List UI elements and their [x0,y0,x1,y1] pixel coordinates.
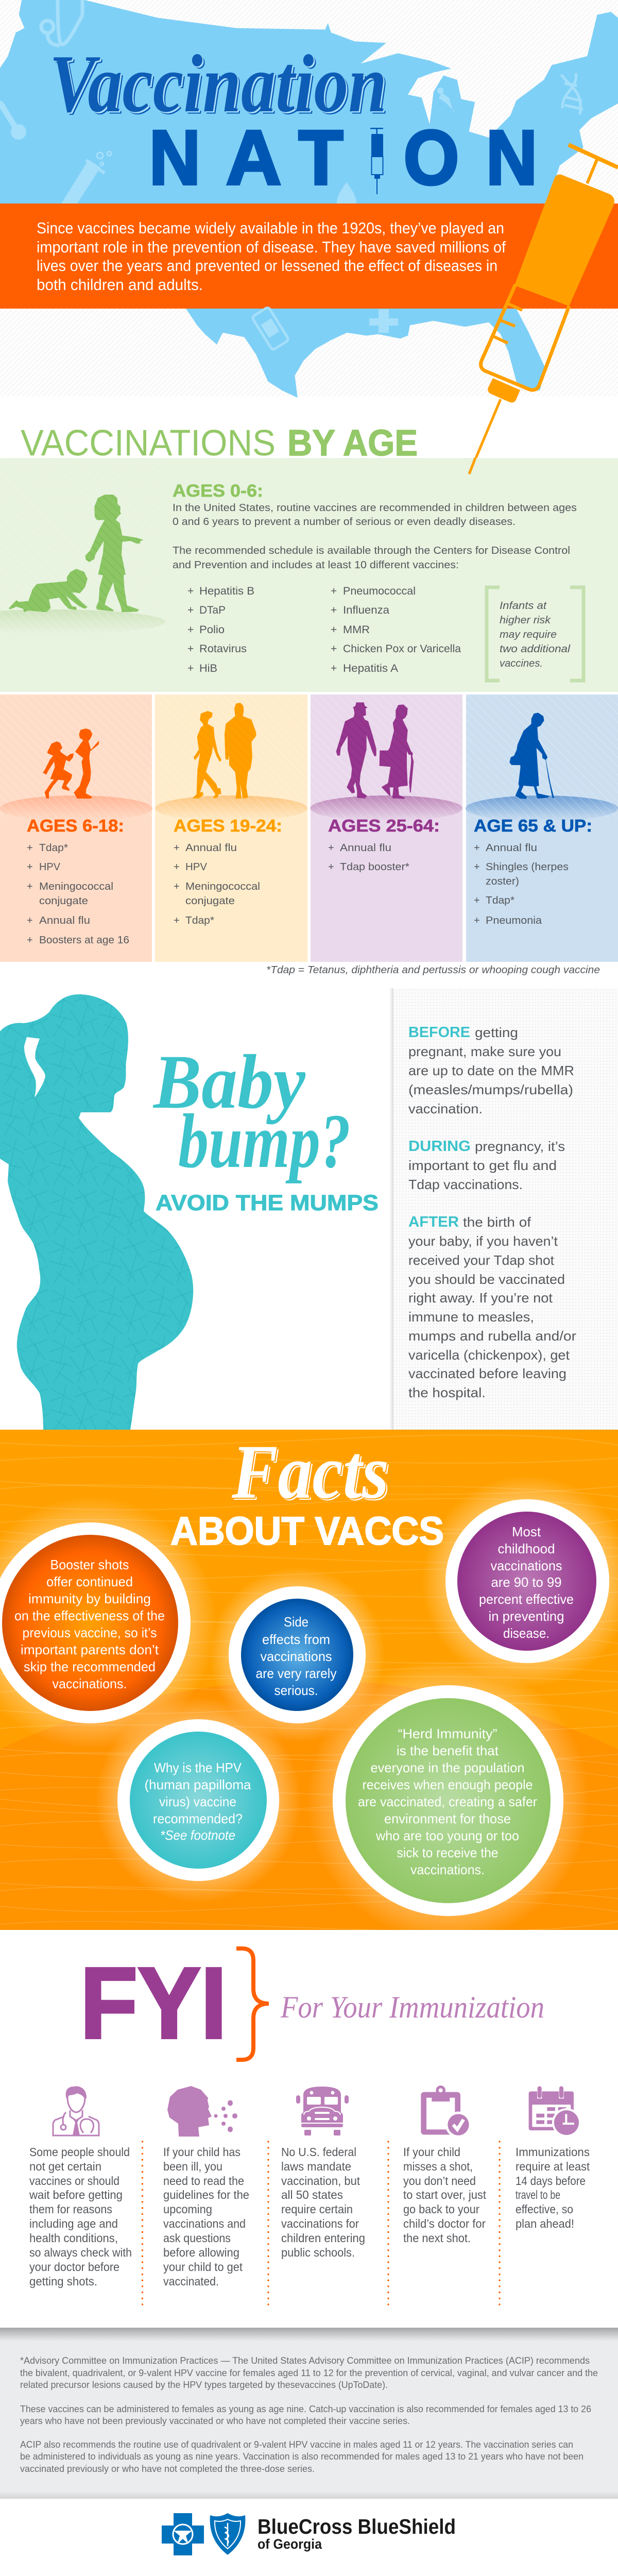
list: conjugate [185,895,235,907]
FYI column 2 text [163,2145,249,2288]
icon: DNA [561,73,583,114]
heading: ages 0-6: AGES 0-6: [173,481,263,501]
bracket callout [487,587,583,681]
bracket callout: vaccines. [500,658,543,669]
FYI column 3 text: all 50 states [281,2188,343,2201]
after text: right away. If you’re not [408,1290,553,1306]
during text: important to get flu and [408,1158,557,1173]
vaccine list column 1 [187,585,254,674]
list: + [174,861,180,873]
FYI column 1 text: Some people should [29,2145,130,2159]
silhouette: two children [43,728,99,799]
FYI column 5 text: require at least [516,2160,590,2173]
list: + [27,915,33,926]
FYI column 3 text: vaccination, but [281,2174,360,2188]
icon: blue shield [210,2513,245,2555]
FYI column 3 text: laws mandate [281,2160,351,2173]
heading: about vaccs: ABOUT VACCS [170,1509,444,1553]
icon: thermometer [0,100,26,140]
bracket callout: two additional [500,643,571,655]
fact bubble: boosters [0,1497,216,1749]
before text: are up to date on the MMR [408,1063,574,1078]
title: NATION [149,114,538,201]
list: Tdap booster* [340,861,409,873]
after text: the hospital. [408,1385,486,1400]
title: NATION: N [149,114,201,201]
vaccine list column 1: + [187,624,194,636]
FYI column 4 text: the next shot. [403,2231,471,2245]
icon: calendar with clock [529,2088,581,2137]
silhouette: toddler and crawling baby [9,495,143,612]
list: Annual flu [340,842,391,854]
FYI column 5 text: 14 days before [516,2174,586,2188]
fact bubble: side effects: are very rarely [255,1666,337,1681]
FYI column 1 text: so always check with [29,2246,132,2259]
list: Tdap* [39,842,68,854]
map of the United States [0,0,618,398]
panel: ages 19-24 [155,694,307,962]
FYI column 3 text [281,2145,365,2259]
vaccine list column 2: + [331,624,337,636]
icon: sneezing head [167,2086,237,2137]
fact bubble: HPV: Why is the HPV [154,1760,242,1775]
list: + [27,881,33,892]
fact bubble: side effects: vaccinations [261,1649,332,1664]
FYI column 2 text: need to read the [163,2174,244,2188]
fact bubble: effectiveness [422,1476,618,1687]
silhouette: adult couple [336,702,414,799]
list: + [474,861,480,873]
icon: stethoscope [41,0,82,45]
icon: medical cross [369,309,398,333]
needle tip overlapping panel [469,458,475,474]
FYI column 1 text: including age and [29,2217,118,2230]
title: Vaccination: Vaccination [49,38,387,129]
heading: baby bump: bump? [178,1098,351,1184]
fact bubble: effectiveness: vaccinations [490,1558,562,1573]
green hill [0,609,165,634]
before text: (measles/mumps/rubella) [408,1082,573,1097]
heading: vaccinations by age: BY AGE [287,423,418,464]
intro text: 0 and 6 years to prevent a number of serious or even deadly diseases. [173,516,516,528]
bracket callout: Infants at [500,600,547,612]
FYI column 4 text: you don’t need [403,2174,476,2188]
fact bubble: effectiveness: disease. [503,1625,550,1641]
list: + [328,842,334,854]
list [174,842,260,926]
vaccine list column 2: Hepatitis A [343,663,398,674]
list: + [174,842,180,854]
fact bubble: effectiveness: are 90 to 99 [491,1574,561,1590]
vaccine list column 1: + [187,643,194,655]
after text: varicella (chickenpox), get [408,1347,570,1363]
after text: AFTER [408,1214,459,1230]
intro text: The recommended schedule is available through the Centers for Disease Control [173,545,570,556]
fact bubble: boosters: important parents don’t [21,1642,159,1657]
fact bubble: side effects: Side [284,1614,308,1630]
bracket callout: higher risk [500,615,551,626]
FYI column 2 text: vaccinations and [163,2217,246,2230]
list: Tdap* [185,915,214,926]
vaccine list column 1: + [187,604,194,616]
vaccine list column 1: Rotavirus [199,643,247,655]
hero panel [0,0,618,474]
vaccine list column 1: + [187,663,194,674]
list: HPV [185,861,208,873]
FYI column 1 text [29,2145,132,2288]
FYI column 2 text: upcoming [163,2202,212,2216]
FYI column 5 text: plan ahead! [516,2217,574,2230]
after text: immune to measles, [408,1309,534,1325]
FYI column 4 text: misses a shot, [403,2160,473,2173]
vaccine list column 2 [331,585,461,674]
list [474,842,569,926]
icon: clipboard with check [421,2086,471,2138]
hill [466,795,618,821]
fact bubble: boosters: skip the recommended [24,1659,156,1674]
hill [310,795,462,821]
vaccine list column 1: DTaP [199,604,226,616]
fact bubble: herd immunity: “Herd Immunity” [398,1726,497,1741]
list: HPV [39,861,61,873]
orange intro banner [0,204,618,309]
list: Annual flu [486,842,537,854]
heading: FYI: FYI [80,1946,227,2060]
list: + [174,915,180,926]
after text: your baby, if you haven’t [408,1233,558,1249]
panel: footnotes: *Advisory Committee on Immunization Practices — The United States Advisory Committee on Immunization Practices (ACIP) recommends [20,2355,590,2366]
icon: drop [337,182,356,204]
panel: footnotes: the bivalent, quadrivalent, or 9-valent HPV vaccine for females aged 11 to 12 for the prevention of cervical, vaginal, and vulvar cancer and the [20,2368,598,2378]
logo: Blue Cross Blue Shield of Georgia: BlueCross BlueShield [258,2515,456,2538]
fact bubble: HPV: (human papilloma [144,1777,251,1792]
FYI column 4 text: child’s doctor for [403,2217,486,2230]
panel: ages 25-64 [310,694,462,962]
FYI column 5 text: Immunizations [516,2145,590,2159]
icon: large orange syringe [469,145,618,474]
panel: ages 0-6 [0,458,618,692]
list: Shingles (herpes [486,861,569,873]
list [328,842,409,873]
vaccine list column 2: Pneumococcal [343,585,416,597]
vaccine list column 2: + [331,643,337,655]
fact bubble: side effects [210,1567,385,1742]
title: NATION: A [226,114,281,201]
heading: AGES 6-18: [27,816,124,835]
icon: syringe letter I [370,128,383,194]
bracket callout: may require [500,629,557,640]
after text: you should be vaccinated [408,1272,565,1287]
FYI column 1 text: them for reasons [29,2202,112,2216]
silhouette: young couple [192,703,256,799]
fact bubble: boosters: vaccinations. [53,1676,127,1691]
list: Annual flu [39,915,90,926]
vaccine list column 2: + [331,604,337,616]
list: Annual flu [185,842,237,854]
fact bubble: boosters: immunity by building [28,1591,151,1606]
FYI column 5 text: effective, so [516,2202,573,2216]
list: Meningococcal [185,881,260,892]
list: + [474,842,480,854]
panel: footnotes [0,2328,618,2499]
fact bubble: effectiveness: in preventing [488,1608,564,1624]
FYI column 3 text: No U.S. federal [281,2145,356,2159]
panel: facts about vaccs [0,1429,618,1942]
silhouette: senior with cane [509,713,554,799]
FYI column 2 text: before allowing [163,2246,239,2259]
hill [155,795,307,821]
silhouette: pregnant woman [0,994,193,1430]
FYI column 1 text: vaccines or should [29,2174,119,2188]
vaccine list column 1: HiB [199,663,217,674]
vaccine list column 2: MMR [343,624,370,636]
list: + [174,881,180,892]
FYI column 1 text: your doctor before [29,2260,119,2274]
after text: vaccinated before leaving [408,1366,566,1381]
list: + [27,861,33,873]
panel: footnotes: These vaccines can be administered to females as young as age nine. Catch-up vaccination is also recommended for females aged 13 to 26 [20,2404,591,2414]
fact bubble: boosters: previous vaccine, so it’s [23,1625,157,1640]
FYI column 2 text: guidelines for the [163,2188,249,2201]
orange intro banner: important role in the prevention of disease. They have saved millions of [37,238,506,256]
fact bubble: side effects: serious. [274,1683,318,1698]
heading: facts: Facts [231,1429,389,1515]
logo: Blue Cross Blue Shield of Georgia [162,2513,456,2555]
darker hill [0,1680,618,1930]
heading: baby bump [152,1039,379,1215]
fact bubble: effectiveness: percent effective [479,1591,574,1607]
FYI column 2 text: vaccinated. [163,2275,219,2288]
FYI column 3 text: require certain [281,2202,353,2216]
fact bubble: herd immunity: vaccinations. [410,1862,485,1877]
list: Pneumonia [486,915,542,926]
heading: baby bump: Baby [152,1039,306,1125]
FYI column 3 text: vaccinations for [281,2217,359,2230]
fact bubble: herd immunity [306,1659,590,1942]
orange intro banner: Since vaccines became widely available in the 1920s, they’ve played an [37,219,504,237]
intro text: and Prevention and includes at least 10 different vaccines: [173,560,459,571]
list: Boosters at age 16 [39,935,129,946]
list: + [27,842,33,854]
logo: Blue Cross Blue Shield of Georgia: of Georgia [258,2536,322,2552]
fact bubble: herd immunity: environment for those [384,1811,511,1826]
hill [0,795,152,821]
orange intro banner: lives over the years and prevented or lessened the effect of diseases in [37,257,497,275]
FYI column 2 text: ask questions [163,2231,231,2245]
fact bubble: effectiveness: childhood [497,1541,555,1556]
panel: footnotes: related precursor lesions caused by the HPV types targeted by thesevaccines (UpToDate). [20,2380,388,2390]
list: Tdap* [486,895,514,906]
FYI column 1 text: getting shots. [29,2275,97,2288]
before text: pregnant, make sure you [408,1044,561,1059]
vaccine list column 2: Chicken Pox or Varicella [343,643,461,655]
fact bubble: boosters: offer continued [46,1574,133,1589]
vaccine list column 2: + [331,585,337,597]
heading: AGE 65 & UP: [474,816,592,835]
fact bubble: herd immunity: who are too young or too [375,1828,519,1843]
heading: vaccinations by age [21,423,418,464]
after text [408,1214,576,1400]
FYI column 4 text: to start over, just [403,2188,487,2201]
footnote: Tdap: *Tdap = Tetanus, diphtheria and pertussis or whooping cough vaccine [266,964,600,976]
list: + [474,895,480,906]
list: Meningococcal [39,881,113,892]
vaccine list column 2: + [331,663,337,674]
title: NATION: T [299,114,343,201]
FYI column 3 text: children entering [281,2231,365,2245]
FYI column 5 text: travel to be [516,2188,560,2201]
before text: vaccination. [408,1101,483,1116]
FYI column 4 text: If your child [403,2145,460,2159]
heading: vaccinations by age: VACCINATIONS [21,423,276,464]
list: zoster) [486,876,519,887]
before text: BEFORE [408,1024,470,1041]
subheading: for your immunization: For Your Immunization [280,1990,544,2024]
fact bubble: HPV: virus) vaccine [159,1794,236,1809]
before text: getting [475,1025,518,1040]
title: NATION: O [404,114,459,201]
FYI column 2 text: been ill, you [163,2160,222,2173]
FYI column 1 text: health conditions, [29,2231,118,2245]
during text [408,1138,565,1192]
vaccine list column 1: Polio [199,624,225,636]
panel: footnotes: years who have not been previously vaccinated or who have not completed their vaccine series. [20,2416,410,2426]
during text: DURING [408,1138,471,1155]
icon: bandage [252,307,289,350]
after text: mumps and rubella and/or [408,1328,576,1344]
vaccine list column 2: Influenza [343,604,389,616]
panel: FYI background [0,1930,618,2328]
FYI column 3 text: public schools. [281,2246,355,2259]
heading: AGES 19-24: [174,816,282,835]
fact bubble: herd immunity: everyone in the population [371,1760,524,1775]
curly brace [236,1948,269,2060]
FYI column 1 text: wait before getting [29,2188,123,2201]
list: + [328,861,334,873]
FYI column 4 text [403,2145,487,2245]
vaccine list column 1: + [187,585,194,597]
FYI column 2 text: your child to get [163,2260,243,2274]
list: conjugate [39,895,88,907]
panel: footnotes: ACIP also recommends the routine use of quadrivalent or 9-valent HPV vaccine in males aged 11 or 12 years. The vaccination series can [20,2439,573,2450]
fact bubble: HPV: *See footnote [160,1827,235,1843]
icon: blue cross [162,2513,204,2555]
fact bubble: herd immunity: receives when enough people [363,1777,533,1792]
fact bubble: HPV [95,1697,301,1903]
panel: footnotes: be administered to individuals as young as nine years. Vaccination is also recommended for males aged 13 to 21 years who have not been [20,2451,583,2462]
icon: test tube [61,151,111,204]
list: + [474,915,480,926]
panel: ages 6-18 [0,694,152,962]
FYI column 2 text: If your child has [163,2145,241,2159]
during text: Tdap vaccinations. [408,1177,523,1192]
after text: received your Tdap shot [408,1252,555,1268]
after text: the birth of [463,1214,531,1230]
fact bubble: side effects: effects from [262,1632,330,1647]
fact bubble: effectiveness: Most [512,1524,541,1539]
FYI column 4 text: go back to your [403,2202,479,2216]
during text: pregnancy, it’s [475,1139,565,1154]
list [27,842,129,946]
icon: school bus [296,2087,349,2136]
intro text [173,502,577,571]
fact bubble: herd immunity: sick to receive the [397,1845,499,1860]
fact bubble: boosters: on the effectiveness of the [14,1608,165,1623]
panel: pregnancy advice [389,988,618,1430]
intro text: In the United States, routine vaccines are recommended in children between ages [173,502,577,514]
icon: dropper [437,88,455,112]
FYI column 1 text: not get certain [29,2160,101,2173]
list: + [27,935,33,946]
icon: doctor [53,2086,99,2136]
fact bubble: boosters: Booster shots [50,1557,129,1572]
vaccine list column 1: Hepatitis B [199,585,254,597]
heading: AGES 25-64: [328,816,440,835]
orange intro banner: both children and adults. [37,276,203,294]
panel: age 65 and up [466,694,618,962]
before text [408,1024,574,1116]
heading: baby bump: AVOID THE MUMPS [156,1191,379,1215]
fact bubble: herd immunity: are vaccinated, creating a safer [358,1794,537,1809]
fact bubble: HPV: recommended? [153,1811,243,1826]
panel: footnotes: vaccinated previously or who have not completed the three-dose series. [20,2464,315,2474]
fact bubble: herd immunity: is the benefit that [397,1743,499,1758]
title: NATION: N [486,114,538,201]
FYI column 5 text [516,2145,590,2230]
